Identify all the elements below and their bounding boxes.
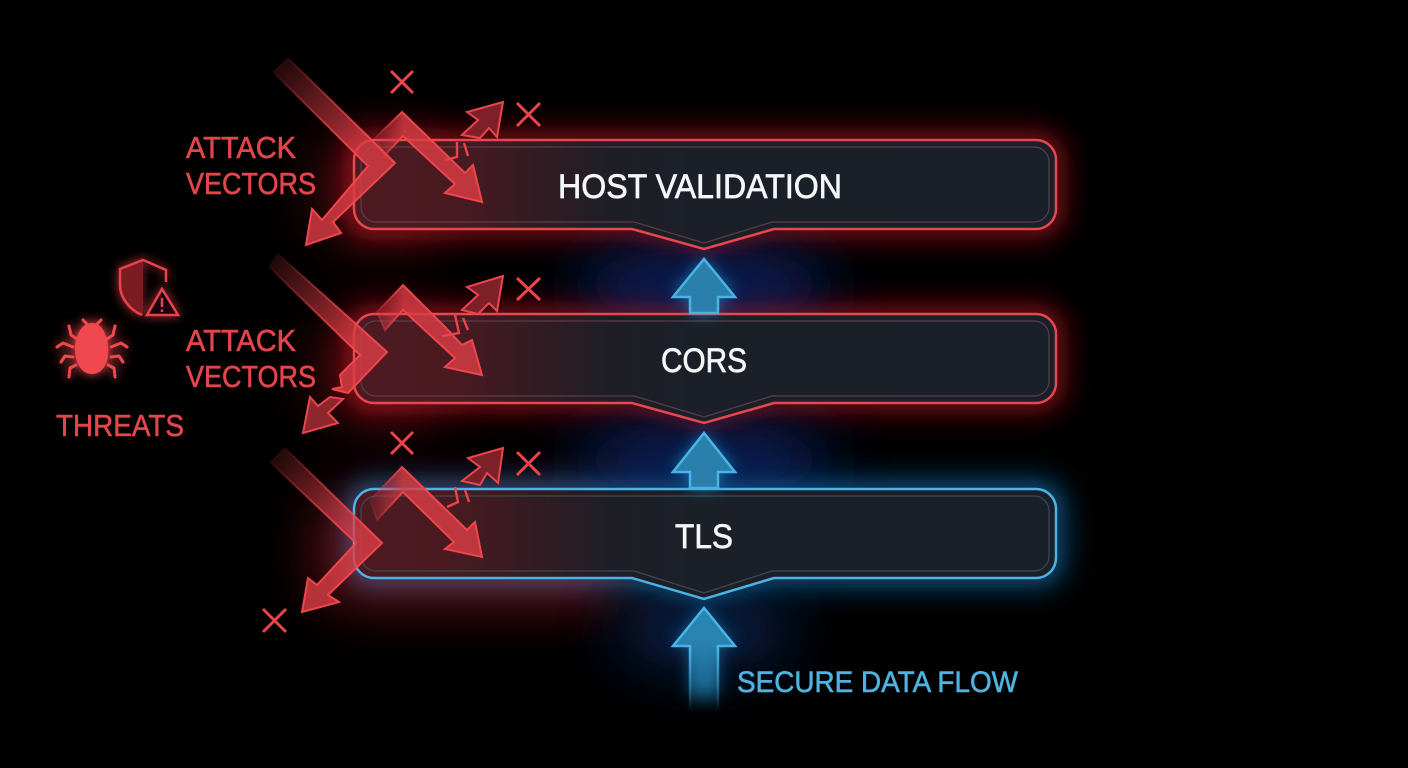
label: attack vectors top: VECTORS bbox=[186, 166, 316, 201]
label: attack vectors middle: ATTACK bbox=[186, 323, 296, 358]
arrow: small deflection up-right bbox=[462, 448, 503, 485]
arrow: attack chevron down-right bbox=[377, 285, 482, 375]
icon: blocked x bbox=[517, 103, 540, 126]
icon: shield with warning bbox=[120, 260, 178, 315]
icon: blocked x bbox=[391, 432, 413, 454]
label: TLS: TLS bbox=[675, 518, 733, 556]
attack arrows: CORS bbox=[269, 253, 540, 433]
arrow: deflected attack down-left bbox=[270, 448, 382, 612]
fracture ticks bbox=[445, 142, 468, 160]
label: CORS: CORS bbox=[661, 342, 747, 380]
label: threats: THREATS bbox=[56, 408, 184, 443]
attack arrows: host validation bbox=[273, 58, 540, 245]
arrow: incoming attack chevron bbox=[269, 253, 387, 393]
label: host validation: HOST VALIDATION bbox=[558, 168, 842, 206]
arrow: flow into host validation bbox=[673, 259, 735, 313]
icon: bug bbox=[57, 320, 127, 377]
icon: blocked x bbox=[263, 609, 286, 632]
attack arrows: TLS bbox=[263, 432, 540, 632]
arrow: deflected attack down-left bbox=[273, 58, 395, 245]
arrow: secure data flow into TLS bbox=[673, 608, 735, 712]
label: attack vectors top bbox=[186, 130, 316, 201]
arrow: broken deflection down-left bbox=[303, 397, 343, 433]
panel: TLS layer bbox=[354, 489, 1056, 599]
panel: CORS layer bbox=[354, 314, 1056, 423]
fracture ticks bbox=[442, 315, 468, 336]
panel: host validation layer bbox=[354, 140, 1056, 249]
arrow: small deflection up-right bbox=[462, 102, 503, 138]
icon: blocked x bbox=[391, 71, 413, 93]
fracture ticks bbox=[447, 487, 469, 507]
label: secure data flow: SECURE DATA FLOW bbox=[737, 666, 1019, 699]
icon: blocked x bbox=[517, 452, 540, 475]
label: attack vectors top: ATTACK bbox=[186, 130, 296, 165]
arrow: attack chevron down-right bbox=[370, 467, 482, 557]
arrow: small deflection up-right bbox=[462, 276, 503, 314]
arrow: attack chevron down-right bbox=[375, 112, 482, 202]
arrow: flow into CORS bbox=[673, 433, 735, 488]
label: attack vectors middle: VECTORS bbox=[186, 359, 316, 394]
icon: blocked x bbox=[517, 278, 540, 300]
label: attack vectors middle bbox=[186, 323, 316, 394]
